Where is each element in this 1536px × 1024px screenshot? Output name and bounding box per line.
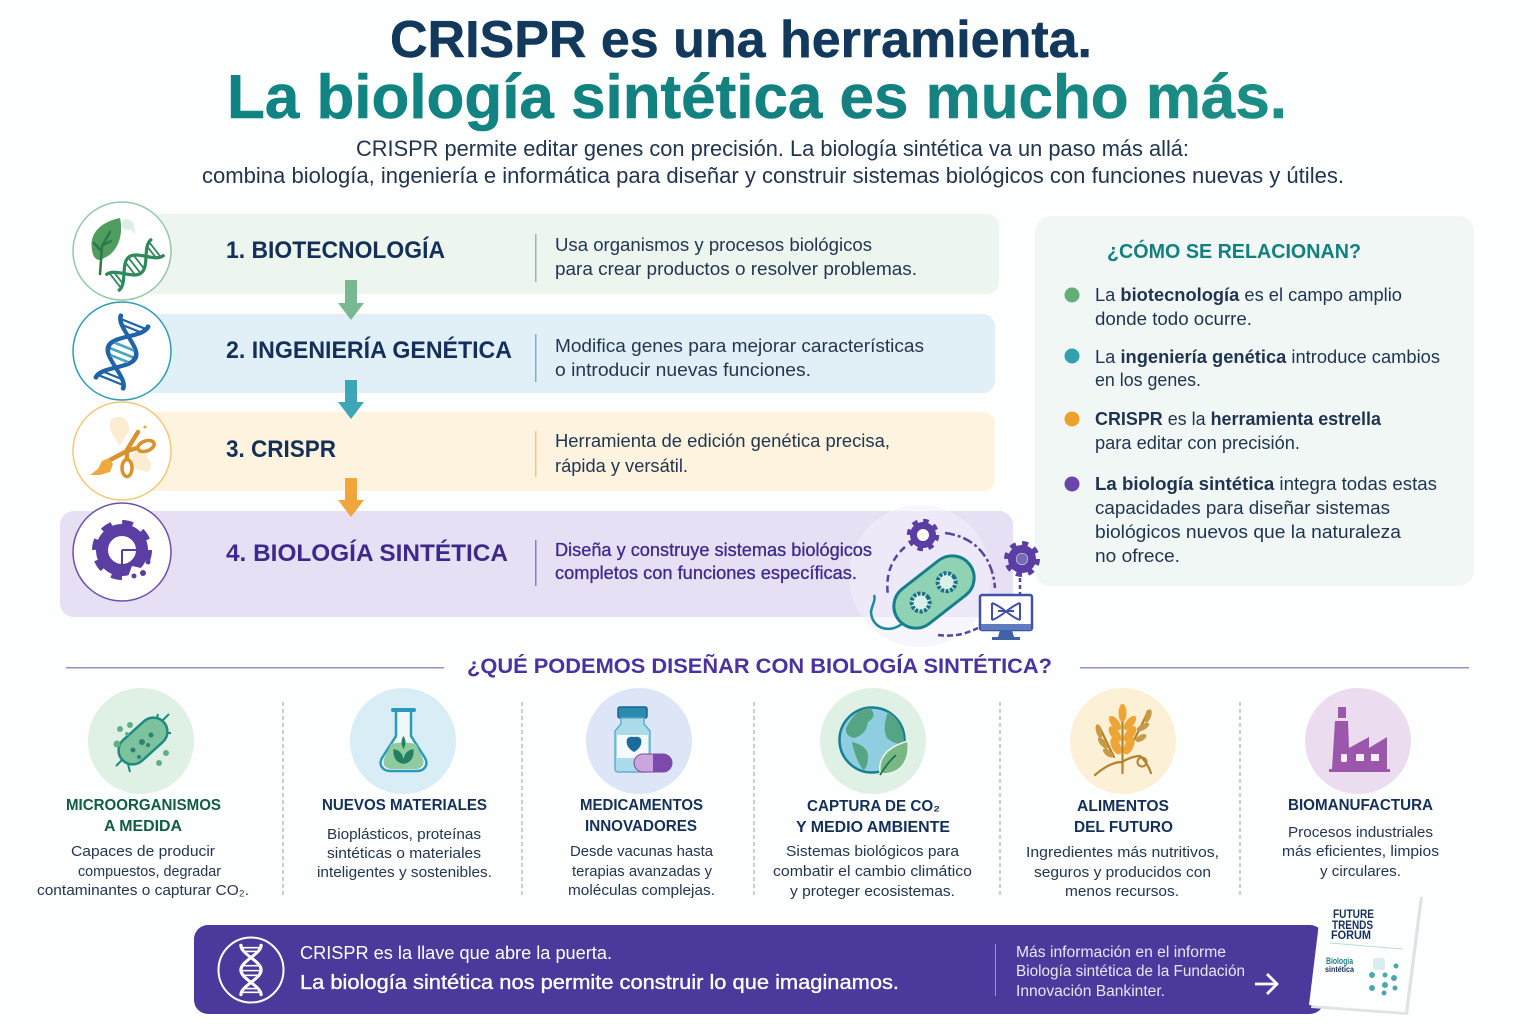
- column: nuevos materiales: [317, 688, 492, 881]
- icon: monitor: [980, 595, 1032, 640]
- description: Procesos industriales: [1288, 824, 1433, 841]
- label: [66, 797, 221, 835]
- icon: globe and leaf: [820, 688, 926, 794]
- panel: 1 biotecnología: [140, 214, 999, 294]
- banner link text: Más información en el informe: [1016, 944, 1226, 961]
- subtitle: [202, 136, 1344, 188]
- column: medicamentos: [568, 688, 715, 899]
- label: A MEDIDA: [104, 818, 182, 835]
- icon: purple gear: [73, 503, 171, 601]
- heading: ingeniería genética: 2. INGENIERÍA GENÉTICA: [226, 336, 512, 364]
- icon: blue dna: [73, 302, 171, 400]
- arrow: 2 to 3: [338, 380, 364, 419]
- column: microorganismos: [37, 688, 249, 899]
- description: Ingredientes más nutritivos,: [1026, 844, 1219, 861]
- heading: qué podemos diseñar: ¿QUÉ PODEMOS DISEÑAR CON BIOLOGÍA SINTÉTICA?: [467, 655, 1052, 678]
- description: más eficientes, limpios: [1282, 843, 1439, 860]
- icon: factory: [1305, 688, 1411, 794]
- label: DEL FUTURO: [1074, 819, 1173, 836]
- text: biotecnología: [555, 234, 917, 279]
- item: crispr: [1064, 408, 1382, 453]
- item: biotecnología: La biotecnología es el campo amplio: [1095, 284, 1402, 305]
- description: y proteger ecosistemas.: [790, 883, 955, 900]
- description: Sistemas biológicos para: [786, 843, 960, 860]
- panel: 3 crispr: [140, 412, 995, 491]
- column: biomanufactura: [1282, 688, 1439, 880]
- text: crispr: Herramienta de edición genética precisa,: [555, 430, 890, 451]
- banner link text: Innovación Bankinter.: [1016, 983, 1165, 1000]
- icon: flask: [350, 688, 456, 794]
- label: Y MEDIO AMBIENTE: [796, 819, 950, 836]
- label: INNOVADORES: [585, 818, 697, 835]
- description: [1282, 824, 1439, 880]
- description: moléculas complejas.: [568, 882, 715, 899]
- illustration: engineered bacterium: [871, 521, 1038, 640]
- banner message: [300, 943, 899, 994]
- arrow: 1 to 2: [338, 280, 364, 320]
- item: crispr: para editar con precisión.: [1095, 432, 1300, 453]
- book cover: TRENDS: [1332, 918, 1373, 932]
- description: Bioplásticos, proteínas: [327, 826, 481, 843]
- panel: 2 ingeniería genética: [140, 314, 995, 393]
- heading: biología sintética: 4. BIOLOGÍA SINTÉTICA: [226, 539, 508, 567]
- description: [37, 843, 249, 899]
- description: contaminantes o capturar CO₂.: [37, 882, 249, 899]
- description: Capaces de producir: [71, 843, 215, 860]
- icon: gear 2: [1006, 544, 1038, 574]
- description: terapias avanzadas y: [572, 863, 712, 880]
- text: ingeniería genética: [555, 335, 924, 380]
- text: crispr: [555, 430, 890, 476]
- item: biología sintética: capacidades para diseñar sistemas: [1095, 497, 1390, 518]
- description: [568, 843, 715, 899]
- book cover: FUTURE: [1333, 907, 1374, 921]
- label: [1074, 798, 1173, 836]
- text: biología sintética: [555, 539, 872, 583]
- item: biotecnología: donde todo ocurre.: [1095, 308, 1252, 329]
- description: Desde vacunas hasta: [570, 843, 714, 860]
- text: biología sintética: Diseña y construye sistemas biológicos: [555, 539, 872, 560]
- icon: banner dna: [218, 938, 284, 1002]
- heading: cómo se relacionan: ¿CÓMO SE RELACIONAN?: [1107, 239, 1361, 263]
- text: ingeniería genética: o introducir nuevas funciones.: [555, 359, 811, 380]
- panel: 4 biología sintética: [60, 505, 1013, 647]
- label: BIOMANUFACTURA: [1288, 797, 1433, 814]
- icon: microbe: [88, 688, 194, 794]
- description: inteligentes y sostenibles.: [317, 864, 492, 881]
- description: [773, 843, 972, 900]
- label: [580, 797, 703, 835]
- description: y circulares.: [1320, 863, 1401, 880]
- text: biotecnología: para crear productos o resolver problemas.: [555, 258, 917, 279]
- icon: wheat: [1070, 688, 1176, 794]
- item: biología sintética: biológicos nuevos que la naturaleza: [1095, 521, 1402, 542]
- column: captura de co2: [773, 688, 972, 900]
- title: La biología sintética es mucho más.: [227, 63, 1287, 132]
- banner: [194, 925, 1324, 1014]
- book cover: sintética: [1325, 965, 1354, 974]
- item: ingeniería genética: [1064, 346, 1440, 390]
- icon: scissors: [73, 402, 171, 500]
- title: [227, 11, 1287, 132]
- icon: leaf and dna: [73, 202, 171, 300]
- arrow: 3 to 4: [338, 478, 364, 517]
- item: biología sintética: no ofrece.: [1095, 545, 1180, 566]
- panel: cómo se relacionan: [1035, 216, 1474, 586]
- heading: biotecnología: 1. BIOTECNOLOGÍA: [226, 236, 445, 264]
- item: biología sintética: [1064, 473, 1437, 566]
- text: ingeniería genética: Modifica genes para mejorar características: [555, 335, 924, 356]
- description: compuestos, degradar: [78, 863, 221, 880]
- text: biología sintética: completos con funciones específicas.: [555, 562, 857, 583]
- subtitle: CRISPR permite editar genes con precisión. La biología sintética va un paso más allá:: [356, 136, 1189, 161]
- description: [1026, 844, 1219, 900]
- arrow: banner: [1255, 974, 1277, 994]
- label: [796, 798, 950, 836]
- label: NUEVOS MATERIALES: [322, 797, 487, 814]
- description: combatir el cambio climático: [773, 863, 972, 880]
- item: biología sintética: La biología sintética integra todas estas: [1095, 473, 1437, 494]
- heading: crispr: 3. CRISPR: [226, 436, 336, 463]
- label: ALIMENTOS: [1077, 798, 1169, 815]
- banner link text: [1016, 944, 1245, 1000]
- text: biotecnología: Usa organismos y procesos biológicos: [555, 234, 872, 255]
- label: MICROORGANISMOS: [66, 797, 221, 814]
- description: seguros y producidos con: [1034, 864, 1211, 881]
- icon: gear 1: [909, 521, 937, 549]
- item: ingeniería genética: en los genes.: [1095, 369, 1201, 390]
- banner message: La biología sintética nos permite construir lo que imaginamos.: [300, 972, 899, 994]
- subtitle: combina biología, ingeniería e informática para diseñar y construir sistemas biológicos con funciones nuevas y útiles.: [202, 163, 1344, 188]
- banner message: CRISPR es la llave que abre la puerta.: [300, 943, 612, 963]
- icon: bottle and capsule: [586, 688, 692, 794]
- label: MEDICAMENTOS: [580, 797, 703, 814]
- title: CRISPR es una herramienta.: [390, 11, 1092, 69]
- description: sintéticas o materiales: [327, 845, 481, 862]
- book cover: FORUM: [1331, 928, 1371, 942]
- item: biotecnología: [1064, 284, 1402, 329]
- item: ingeniería genética: La ingeniería genética introduce cambios: [1095, 346, 1440, 367]
- description: [317, 826, 492, 881]
- item: crispr: CRISPR es la herramienta estrella: [1095, 408, 1382, 429]
- text: crispr: rápida y versátil.: [555, 455, 688, 476]
- label: CAPTURA DE CO₂: [807, 798, 940, 815]
- book cover: Biología: [1326, 956, 1354, 966]
- book cover: [1309, 890, 1423, 1015]
- banner link text: Biología sintética de la Fundación: [1016, 963, 1245, 980]
- description: menos recursos.: [1065, 883, 1179, 900]
- column: alimentos: [1026, 688, 1219, 900]
